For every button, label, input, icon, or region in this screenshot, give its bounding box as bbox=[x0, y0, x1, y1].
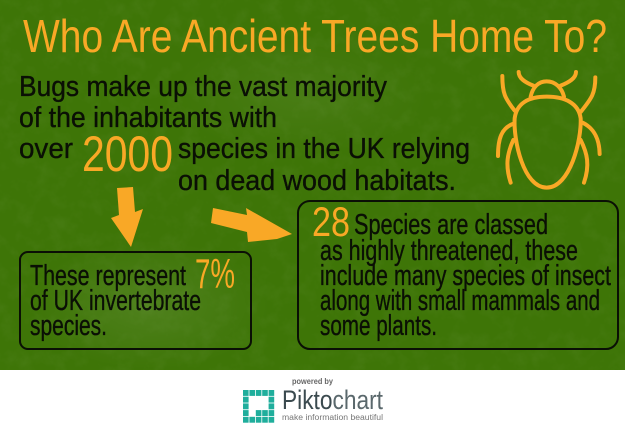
panel: 7% of invertebrates: 7% bbox=[195, 250, 235, 297]
intro text block: species in the UK relying bbox=[178, 133, 470, 165]
icon: Piktochart logo bbox=[243, 390, 274, 423]
panel: 7% of invertebrates bbox=[20, 250, 251, 349]
intro text block: of the inhabitants with bbox=[19, 102, 277, 134]
footer: Piktochart branding bbox=[0, 370, 625, 432]
panel: 28 threatened species bbox=[298, 198, 618, 349]
panel: 7% of invertebrates: These represent bbox=[30, 260, 186, 292]
panel: 7% of invertebrates: species. bbox=[30, 310, 107, 342]
arrow: right to 28 box bbox=[211, 208, 292, 242]
panel: 7% of invertebrates: of UK invertebrate bbox=[30, 285, 201, 317]
icon: beetle bbox=[498, 72, 600, 188]
arrow: down to 7% box bbox=[111, 187, 143, 247]
intro text block: on dead wood habitats. bbox=[178, 165, 456, 197]
intro text block: 2000 bbox=[82, 126, 173, 182]
intro text block: over bbox=[19, 133, 73, 165]
Piktochart wordmark: Piktochart bbox=[282, 385, 383, 415]
panel: 28 threatened species: some plants. bbox=[320, 310, 437, 342]
panel: 28 threatened species: Species are classed bbox=[354, 209, 548, 241]
tagline: make information beautiful bbox=[282, 413, 383, 422]
powered by label: powered by bbox=[292, 377, 334, 386]
panel: 28 threatened species: 28 bbox=[312, 198, 350, 245]
intro text block: Bugs make up the vast majority bbox=[19, 71, 387, 103]
intro text block bbox=[19, 71, 470, 197]
